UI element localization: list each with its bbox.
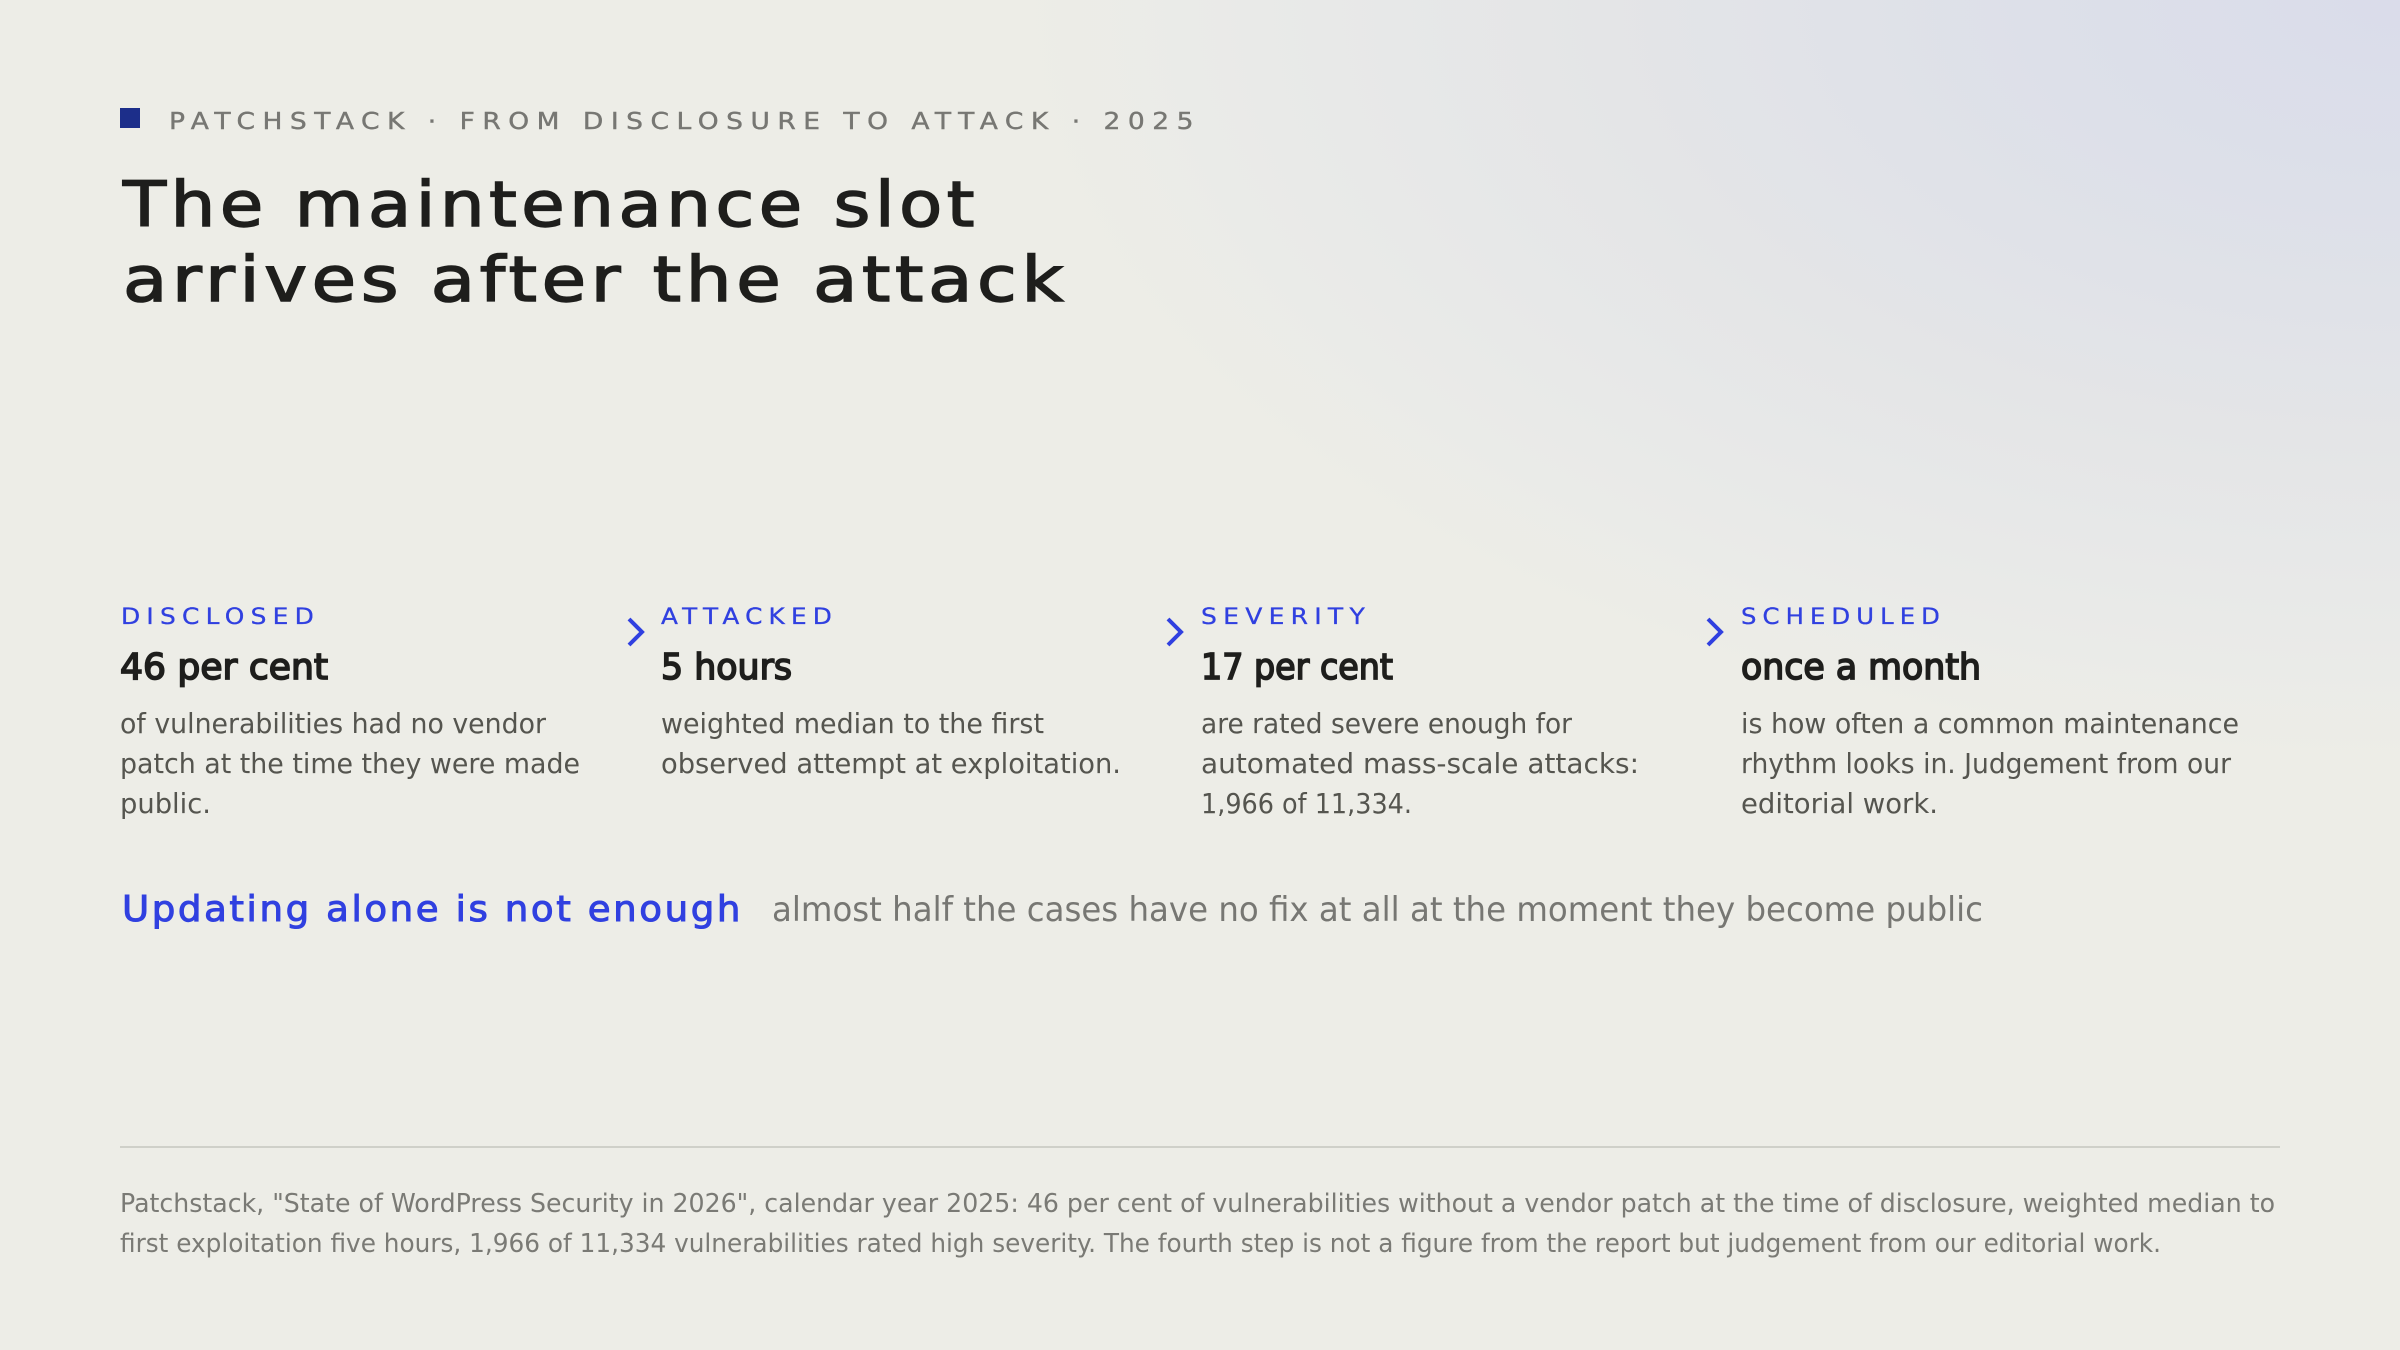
figure: 17 per cent <box>1201 647 1393 688</box>
description <box>1741 707 2239 820</box>
description: public. <box>120 787 211 820</box>
description <box>1201 707 1639 820</box>
figure: 5 hours <box>661 647 792 688</box>
description: patch at the time they were made <box>120 747 580 780</box>
step 1: disclosed <box>120 605 580 820</box>
description: 1,966 of 11,334. <box>1201 787 1412 820</box>
label: SEVERITY <box>1201 605 1371 630</box>
description: weighted median to the first <box>661 707 1044 740</box>
figure: 46 per cent <box>120 647 328 688</box>
header <box>120 108 1201 316</box>
step 2: attacked <box>661 605 1121 780</box>
icon: navy square marker <box>120 108 140 128</box>
label: SCHEDULED <box>1741 605 1946 630</box>
arrow 3 <box>1708 619 1721 645</box>
description: observed attempt at exploitation. <box>661 747 1121 780</box>
label: ATTACKED <box>661 605 838 630</box>
step 3: severity <box>1201 605 1639 820</box>
callout detail: almost half the cases have no fix at all at the moment they become public <box>772 890 1983 930</box>
description <box>120 707 580 820</box>
figure: once a month <box>1741 647 1981 688</box>
description: is how often a common maintenance <box>1741 707 2239 740</box>
description <box>661 707 1121 780</box>
title: arrives after the attack <box>123 243 1068 316</box>
callout <box>122 889 1983 930</box>
title: The maintenance slot <box>122 168 979 241</box>
label: DISCLOSED <box>121 605 320 630</box>
step 4: scheduled <box>1741 605 2239 820</box>
arrow 1 <box>629 619 642 645</box>
description: automated mass-scale attacks: <box>1201 747 1639 780</box>
description: of vulnerabilities had no vendor <box>120 707 546 740</box>
source note: first exploitation five hours, 1,966 of 11,334 vulnerabilities rated high severity. The fourth step is not a figure from the report but judgement from our editorial work. <box>120 1229 2161 1259</box>
source note <box>120 1189 2275 1259</box>
description: rhythm looks in. Judgement from our <box>1741 747 2231 780</box>
callout lead: Updating alone is not enough <box>122 889 743 930</box>
arrow 2 <box>1168 619 1181 645</box>
source note: Patchstack, "State of WordPress Security in 2026", calendar year 2025: 46 per cent of vulnerabilities without a vendor patch at the time of disclosure, weighted median to <box>120 1189 2275 1219</box>
description: are rated severe enough for <box>1201 707 1572 740</box>
description: editorial work. <box>1741 787 1938 820</box>
eyebrow: PATCHSTACK · FROM DISCLOSURE TO ATTACK · 2025 <box>169 109 1201 135</box>
title <box>122 168 1068 316</box>
